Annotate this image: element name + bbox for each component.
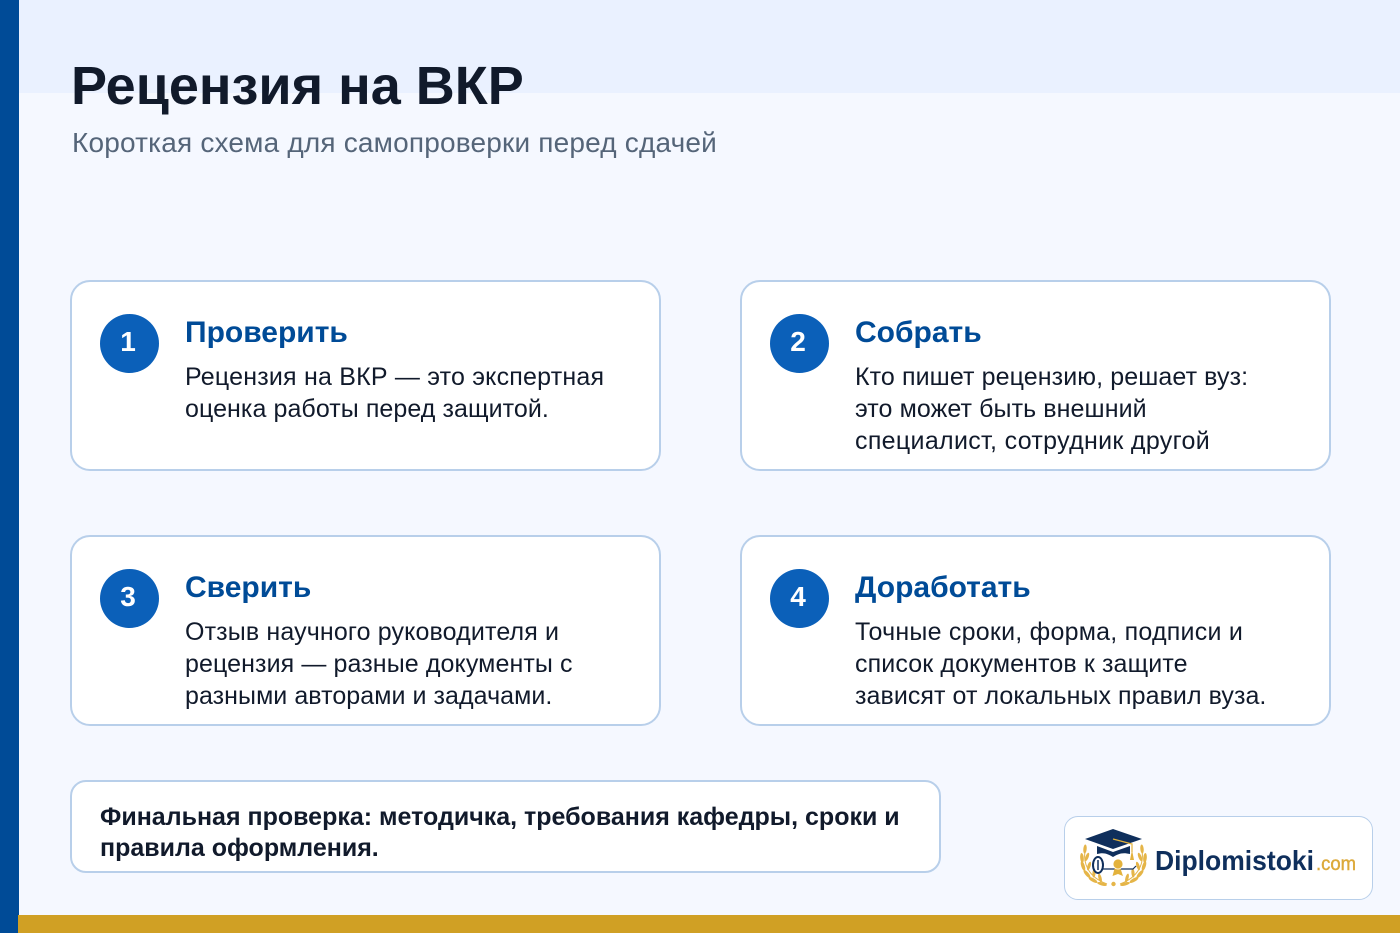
card 2 text: это может быть внешний (855, 395, 1147, 423)
icon: number 1 (100, 314, 159, 373)
card 2 heading: Собрать (855, 316, 982, 349)
icon: number 4 (770, 569, 829, 628)
callout: final check: правила оформления. (100, 834, 379, 862)
panel: card 2 (740, 280, 1331, 471)
icon: number 2: 2 (790, 326, 806, 357)
logo wordmark: Diplomistoki (1155, 845, 1314, 876)
callout: final check: Финальная проверка: методичка, требования кафедры, сроки и (100, 803, 900, 831)
logo: Diplomistoki.com (1064, 816, 1373, 900)
card 4 text: зависят от локальных правил вуза. (855, 682, 1266, 710)
card 4 text (855, 618, 1266, 710)
card 3 text: разными авторами и задачами. (185, 682, 552, 710)
icon: number 3: 3 (120, 581, 136, 612)
card 3 heading: Сверить (185, 571, 311, 604)
card 1 heading: Проверить (185, 316, 348, 349)
card 4 text: список документов к защите (855, 650, 1188, 678)
card 2 text: Кто пишет рецензию, решает вуз: (855, 363, 1248, 391)
card 2 text (855, 363, 1248, 455)
card 1 text: Рецензия на ВКР — это экспертная (185, 363, 604, 391)
icon: number 1: 1 (120, 326, 136, 357)
icon: number 3 (100, 569, 159, 628)
callout: final check (70, 780, 941, 873)
card 4 heading: Доработать (855, 571, 1031, 604)
card 3 text: рецензия — разные документы с (185, 650, 573, 678)
card 4 text: Точные сроки, форма, подписи и (855, 618, 1243, 646)
subtitle: Короткая схема для самопроверки перед сдачей (72, 127, 717, 158)
card 2 text: специалист, сотрудник другой (855, 427, 1210, 455)
icon: number 2 (770, 314, 829, 373)
card 1 text: оценка работы перед защитой. (185, 395, 549, 423)
icon: number 4: 4 (790, 581, 806, 612)
logo domain: .com (1316, 854, 1356, 875)
card 3 text: Отзыв научного руководителя и (185, 618, 559, 646)
icon: graduation cap with wreath and diploma (1080, 829, 1147, 887)
card 1 text (185, 363, 604, 423)
panel: card 4 (740, 535, 1331, 726)
panel: card 1 (70, 280, 661, 471)
card 3 text (185, 618, 573, 710)
panel: card 3 (70, 535, 661, 726)
title: Рецензия на ВКР (71, 56, 524, 116)
